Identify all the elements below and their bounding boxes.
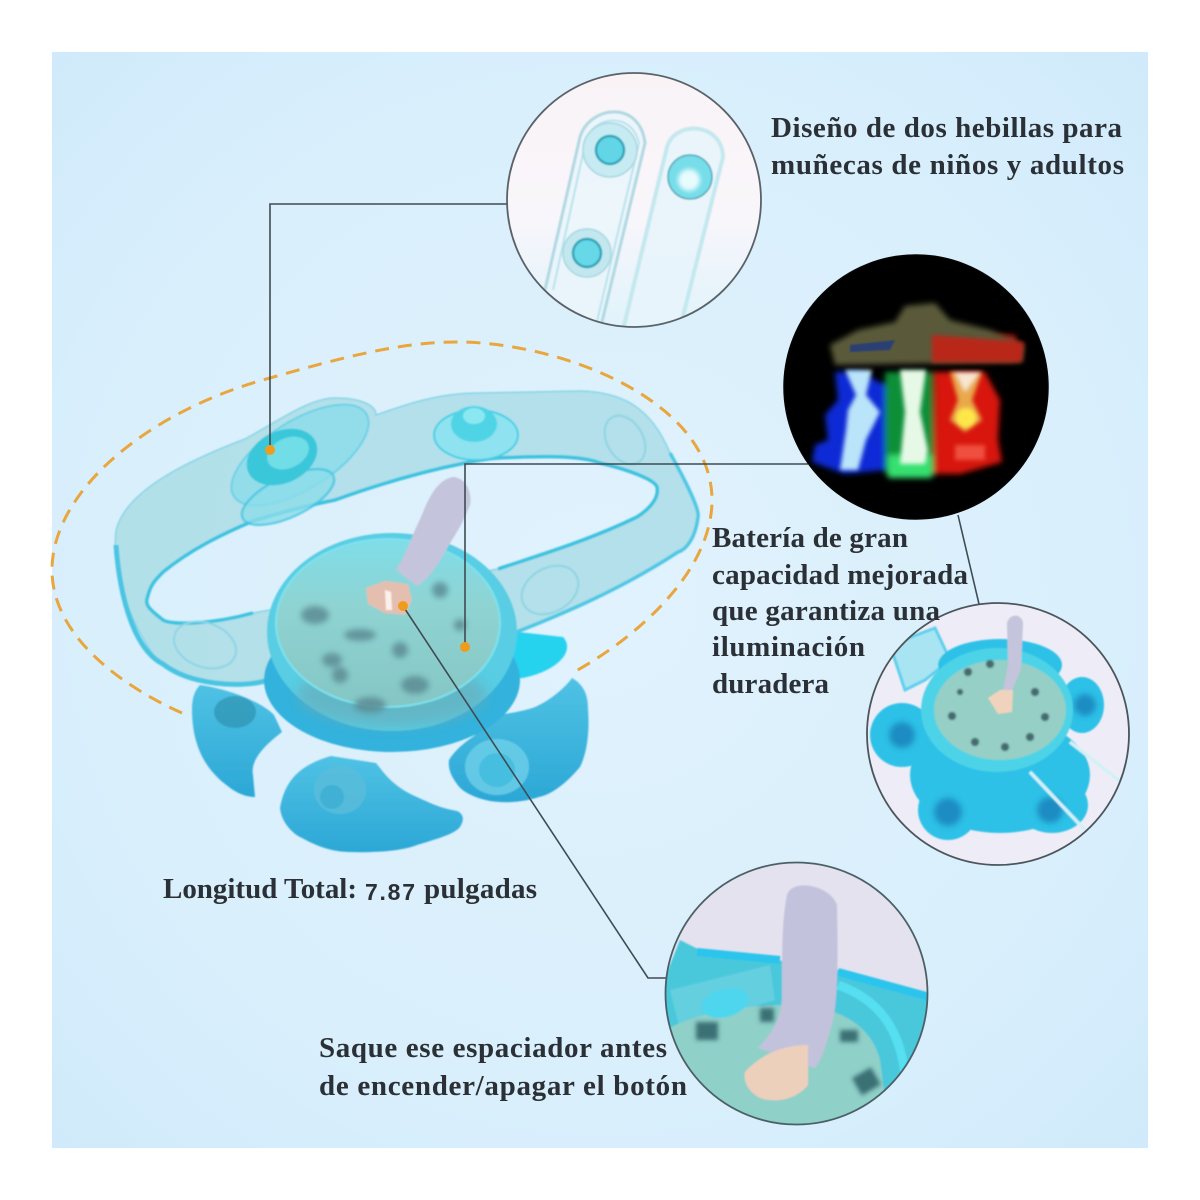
circle detail: two buckles [507,73,761,330]
text: two buckles: Diseño de dos hebillas para [771,112,1122,144]
strap flap ghost marks [596,408,654,472]
stud button [434,410,518,460]
bright rim right [838,985,905,1075]
white hot LED columns [840,370,985,470]
internal components [301,582,466,713]
circle detail: RGB LED lights [784,255,1048,519]
hub rim [267,533,517,731]
circle detail: spacer close-up [660,862,930,1135]
text: remove spacer [319,1032,687,1102]
suction foot: left [192,685,282,797]
petal cups [889,694,1096,826]
buckle button [237,418,327,496]
strap behind [890,628,950,690]
peach button [366,581,412,615]
hub face [276,539,500,707]
text: remove spacer: de encender/apagar el botón [319,1070,687,1102]
leader line: LED circle to hub circle [958,515,979,604]
text: total length: 7.87 [365,879,415,905]
text: two buckles [771,112,1124,181]
left textured band [670,965,775,1030]
face [934,660,1066,760]
text: battery: capacidad mejorada [712,559,968,591]
text: battery: iluminación [712,631,865,663]
dashed orange length ellipse [52,342,712,713]
device silhouette top [830,303,1024,365]
text: total length: pulgadas [424,873,537,905]
peach button [988,690,1013,714]
text: battery: que garantiza una [712,595,940,627]
spacer tab [1003,616,1023,690]
suction foot: right [449,678,589,802]
leader line: button to bottom circle [403,606,668,978]
leader line: buckle to top circle [270,204,510,450]
strap passing in front [1030,742,1125,830]
components [948,660,1049,751]
spacer tab [758,885,838,1068]
text: two buckles: muñecas de niños y adultos [771,149,1124,181]
text: total length [163,873,537,905]
peach button [745,1045,808,1100]
strap with two buttons [545,112,645,330]
strap with one stud [623,129,723,330]
inner face [670,1004,885,1124]
strap outer rim right [514,453,698,633]
petals [870,639,1104,840]
cyan blob behind hub [490,630,567,680]
suction foot: bottom [280,756,463,852]
glowing blue, green and red bands [812,335,1016,478]
buckle flap [216,385,384,525]
text: battery: Batería de gran [712,522,908,554]
turquoise body [666,939,926,1090]
text: battery [712,522,968,700]
text: total length: Longitud Total: [163,873,357,905]
wrist strap band [115,391,698,690]
bright rim top [697,952,930,997]
foot cup details [314,766,366,814]
spacer tab [396,477,470,586]
text: battery: duradera [712,668,830,700]
circle detail: top view of hub [867,603,1129,865]
strap inner edge highlight [147,457,657,623]
rim [921,648,1073,772]
leader line: hub to LED circle [465,464,808,647]
orange anchor dots [265,445,470,652]
blue reflection [702,988,748,1018]
dark components [696,1008,881,1096]
text: remove spacer: Saque ese espaciador antes [319,1032,667,1064]
hub base [264,608,520,752]
product: LED bracelet [115,385,698,852]
